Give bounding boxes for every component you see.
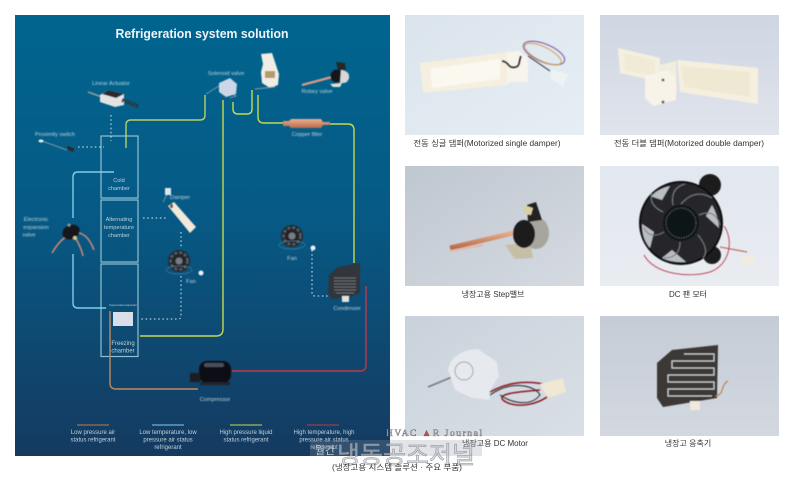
icon: fan right: Fan bbox=[287, 256, 297, 262]
legend: high pressure liquid bbox=[219, 425, 273, 444]
caption: DC fan motor: DC 팬 모터 bbox=[669, 290, 707, 299]
photo: step valve bbox=[405, 166, 584, 286]
legend: high temperature high pressure: pressure air status bbox=[299, 438, 349, 444]
pipe: U link between valves bbox=[233, 90, 252, 114]
caption: DC motor: 냉장고용 DC Motor bbox=[462, 438, 528, 448]
pipe: low temperature, cold chamber to expansion valve bbox=[73, 172, 114, 218]
pipe: high temperature, compressor to condenser bbox=[232, 286, 366, 371]
photo: motorized double damper bbox=[600, 15, 779, 135]
icon: condenser: Condenser bbox=[333, 306, 361, 312]
watermark: monthly HVAC&R journal: HVAC ▲R Journal bbox=[386, 429, 482, 439]
photo: refrigerator condenser bbox=[600, 316, 779, 436]
legend: low pressure air bbox=[70, 425, 116, 444]
icon: fan left: Fan bbox=[186, 279, 196, 285]
chamber: freezing: Freezing bbox=[111, 341, 135, 347]
legend: low temperature low pressure air: pressure air status bbox=[143, 438, 193, 444]
legend: high temperature high pressure bbox=[293, 425, 355, 451]
chamber: cold: chamber bbox=[108, 186, 130, 192]
watermark: monthly HVAC&R journal: 월간 bbox=[315, 444, 335, 457]
icon: electronic expansion valve: expansion bbox=[23, 225, 49, 231]
caption: refrigerator condenser: 냉장고 응축기 bbox=[665, 438, 711, 448]
icon: copper filter bbox=[283, 119, 330, 138]
photo: motorized single damper bbox=[405, 15, 584, 135]
icon: fan right bbox=[279, 225, 316, 262]
chamber: alternating temperature: temperature bbox=[104, 225, 134, 231]
chamber: freezing: chamber bbox=[111, 348, 135, 354]
pipe: low pressure air, evaporator to compressor bbox=[110, 311, 198, 389]
watermark: monthly HVAC&R journal bbox=[310, 429, 482, 469]
chamber: alternating temperature: Alternating bbox=[106, 217, 132, 223]
dotted control lines bbox=[78, 115, 328, 319]
photo: DC fan motor bbox=[600, 166, 779, 286]
legend: low pressure air: Low pressure air bbox=[71, 430, 115, 436]
legend: high pressure liquid: status refrigerant bbox=[223, 438, 269, 444]
pipe: filter to condenser bbox=[258, 95, 354, 263]
chamber: alternating temperature: chamber bbox=[108, 233, 130, 239]
legend: high temperature high pressure: High temperature, high bbox=[293, 430, 355, 436]
pipe: high pressure liquid, cold chamber to solenoid bbox=[126, 95, 205, 148]
icon: copper filter: Copper filter bbox=[292, 132, 322, 138]
icon: electronic expansion valve: valve bbox=[22, 232, 36, 238]
caption: motorized single damper: 전동 싱글 댐퍼(Motorized single damper) bbox=[414, 138, 561, 148]
caption: motorized double damper: 전동 더블 댐퍼(Motorized double damper) bbox=[614, 138, 764, 148]
icon: rotary valve: Rotary valve bbox=[301, 89, 333, 95]
icon: solenoid valve: Solenoid valve bbox=[208, 71, 244, 77]
legend: high pressure liquid: High pressure liquid bbox=[219, 430, 273, 436]
icon: solenoid valve bbox=[206, 71, 244, 98]
icon: proximity switch bbox=[35, 132, 75, 152]
title: Refrigeration system solution bbox=[116, 27, 288, 41]
icon: electronic expansion valve bbox=[22, 217, 94, 256]
icon: electronic expansion valve: Electronic bbox=[24, 217, 48, 223]
chamber: cold bbox=[101, 136, 138, 198]
icon: fan left bbox=[166, 250, 204, 285]
caption: step valve: 냉장고용 Step밸브 bbox=[462, 289, 524, 299]
panel: refrigeration system diagram bbox=[15, 15, 390, 456]
icon: condenser bbox=[328, 263, 361, 312]
icon: proximity switch: Proximity switch bbox=[35, 132, 75, 138]
legend: low temperature low pressure air bbox=[139, 425, 197, 451]
icon: linear actuator: Linear Actuator bbox=[92, 81, 130, 87]
icon: compressor: Compressor bbox=[200, 397, 230, 403]
icon: linear actuator bbox=[88, 81, 138, 107]
legend: low temperature low pressure air: Low temperature, low bbox=[139, 430, 197, 436]
icon: damper bbox=[163, 188, 196, 233]
icon: compressor bbox=[190, 361, 231, 403]
pipe: high pressure liquid, solenoid to freezing chamber bbox=[140, 100, 223, 336]
icon: rotary valve bbox=[301, 62, 349, 95]
legend: low temperature low pressure air: refrigerant bbox=[154, 445, 182, 451]
chamber: cold: Cold bbox=[113, 178, 125, 184]
pipe: low temperature, expansion valve to freezing chamber bbox=[73, 254, 106, 308]
chamber: freezing: Supercooled evaporator bbox=[109, 303, 137, 307]
icon: damper: Damper bbox=[170, 195, 190, 201]
legend: low pressure air: status refrigerant bbox=[70, 438, 116, 444]
chamber: alternating temperature bbox=[101, 200, 138, 262]
figure caption: (냉장고용 시스템 솔루션 · 주요 부품) bbox=[332, 462, 462, 472]
chamber: freezing bbox=[101, 264, 138, 356]
legend: high temperature high pressure: refrigerant bbox=[310, 445, 338, 451]
photo: DC motor bbox=[405, 316, 584, 436]
watermark: monthly HVAC&R journal: 냉동공조저널 bbox=[337, 442, 475, 469]
icon: rotary check valve bbox=[255, 53, 279, 89]
